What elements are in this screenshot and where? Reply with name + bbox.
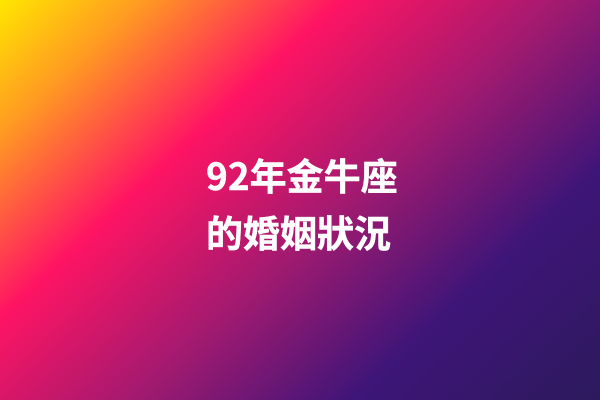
title: 的婚姻狀況 <box>206 204 391 258</box>
title: 92年金牛座 <box>206 147 398 201</box>
title <box>206 147 398 258</box>
